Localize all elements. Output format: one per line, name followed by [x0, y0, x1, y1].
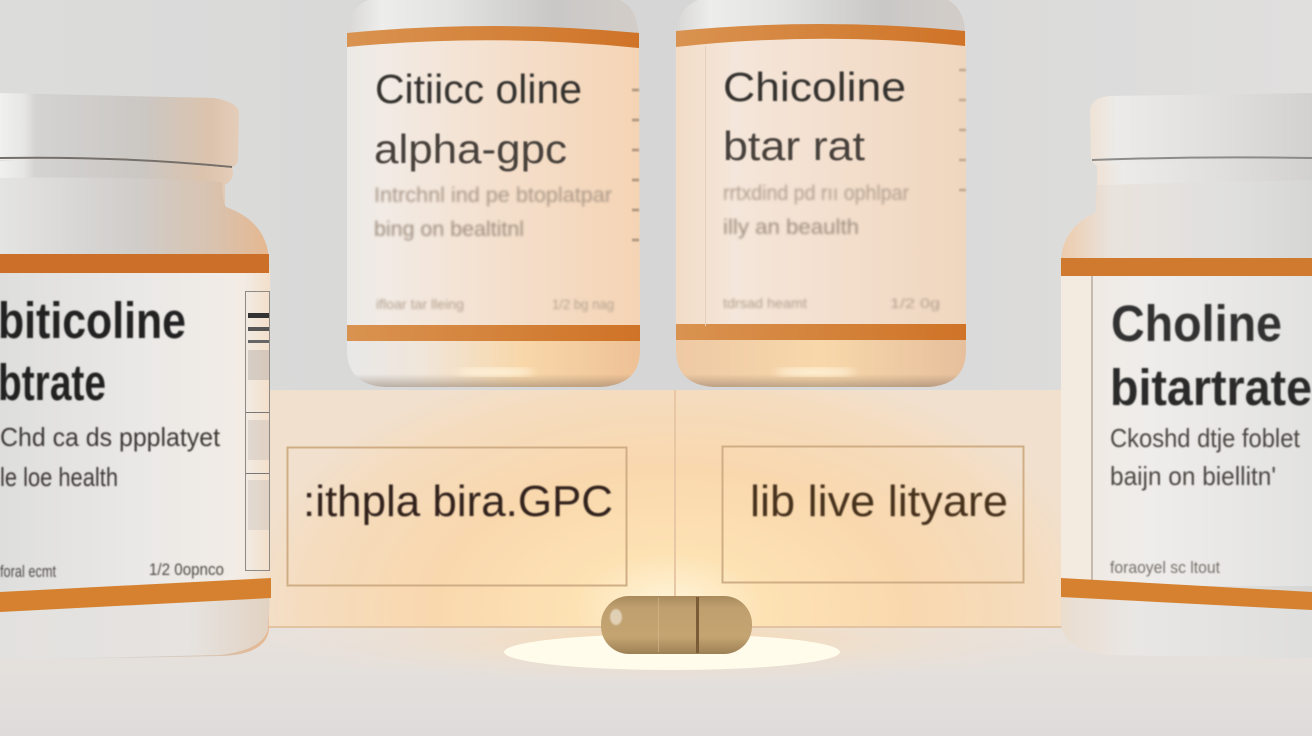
- nutrition facts panel: [246, 292, 270, 570]
- left bottle label text: [0, 292, 224, 581]
- right bottle label text: foraoyel sc ltout: [1110, 558, 1220, 577]
- top centre-left bottle: ifloar tar lleing: [376, 296, 464, 312]
- left bottle label text: btrate: [0, 354, 106, 411]
- top centre-right bottle: illy an beaulth: [723, 216, 859, 239]
- box label left: [288, 448, 626, 586]
- top centre-right bottle: btar rat: [723, 123, 866, 169]
- left bottle label text: Chd ca ds ppplatyet: [0, 422, 221, 452]
- top centre-right bottle: 1/2 0g: [890, 295, 940, 311]
- top centre-right bottle: tdrsad heamt: [723, 295, 807, 311]
- left bottle label text: le loe health: [0, 462, 118, 492]
- glowing box panels: [268, 390, 1062, 628]
- top centre-right bottle: Chicoline: [723, 64, 906, 110]
- top centre-left bottle: Intrchnl ind pe btoplatpar: [374, 184, 612, 207]
- glowing light pool: [504, 634, 840, 670]
- box label right: lib live lityare: [750, 477, 1008, 526]
- right bottle label text: Ckoshd dtje foblet: [1110, 423, 1301, 453]
- box label right: [722, 446, 1024, 582]
- left bottle label text: 1/2 0opnco: [149, 560, 224, 579]
- top centre-left bottle: [347, 0, 640, 387]
- top centre-left bottle: bing on bealtitnl: [374, 218, 524, 241]
- right front bottle: [1061, 93, 1312, 658]
- left bottle label text: biticoline: [0, 292, 186, 349]
- left front bottle: [0, 93, 271, 660]
- right bottle label text: baijn on biellitn': [1110, 461, 1276, 491]
- capsule: [601, 596, 752, 654]
- top centre-right bottle: [676, 0, 966, 387]
- top centre-left bottle: 1/2 bg nag: [552, 296, 614, 312]
- top centre-left bottle: Citiicc oline: [375, 66, 582, 112]
- top centre-left bottle: alpha-gpc: [374, 126, 567, 172]
- right bottle label text: [1110, 295, 1312, 577]
- table surface: [0, 594, 1312, 736]
- box label left: :ithpla bira.GPC: [303, 477, 613, 526]
- top centre-right bottle: rrtxdind pd rıı ophlpar: [723, 182, 909, 205]
- right bottle label text: Choline: [1111, 295, 1282, 352]
- left bottle label text: foral ecmt: [0, 562, 56, 581]
